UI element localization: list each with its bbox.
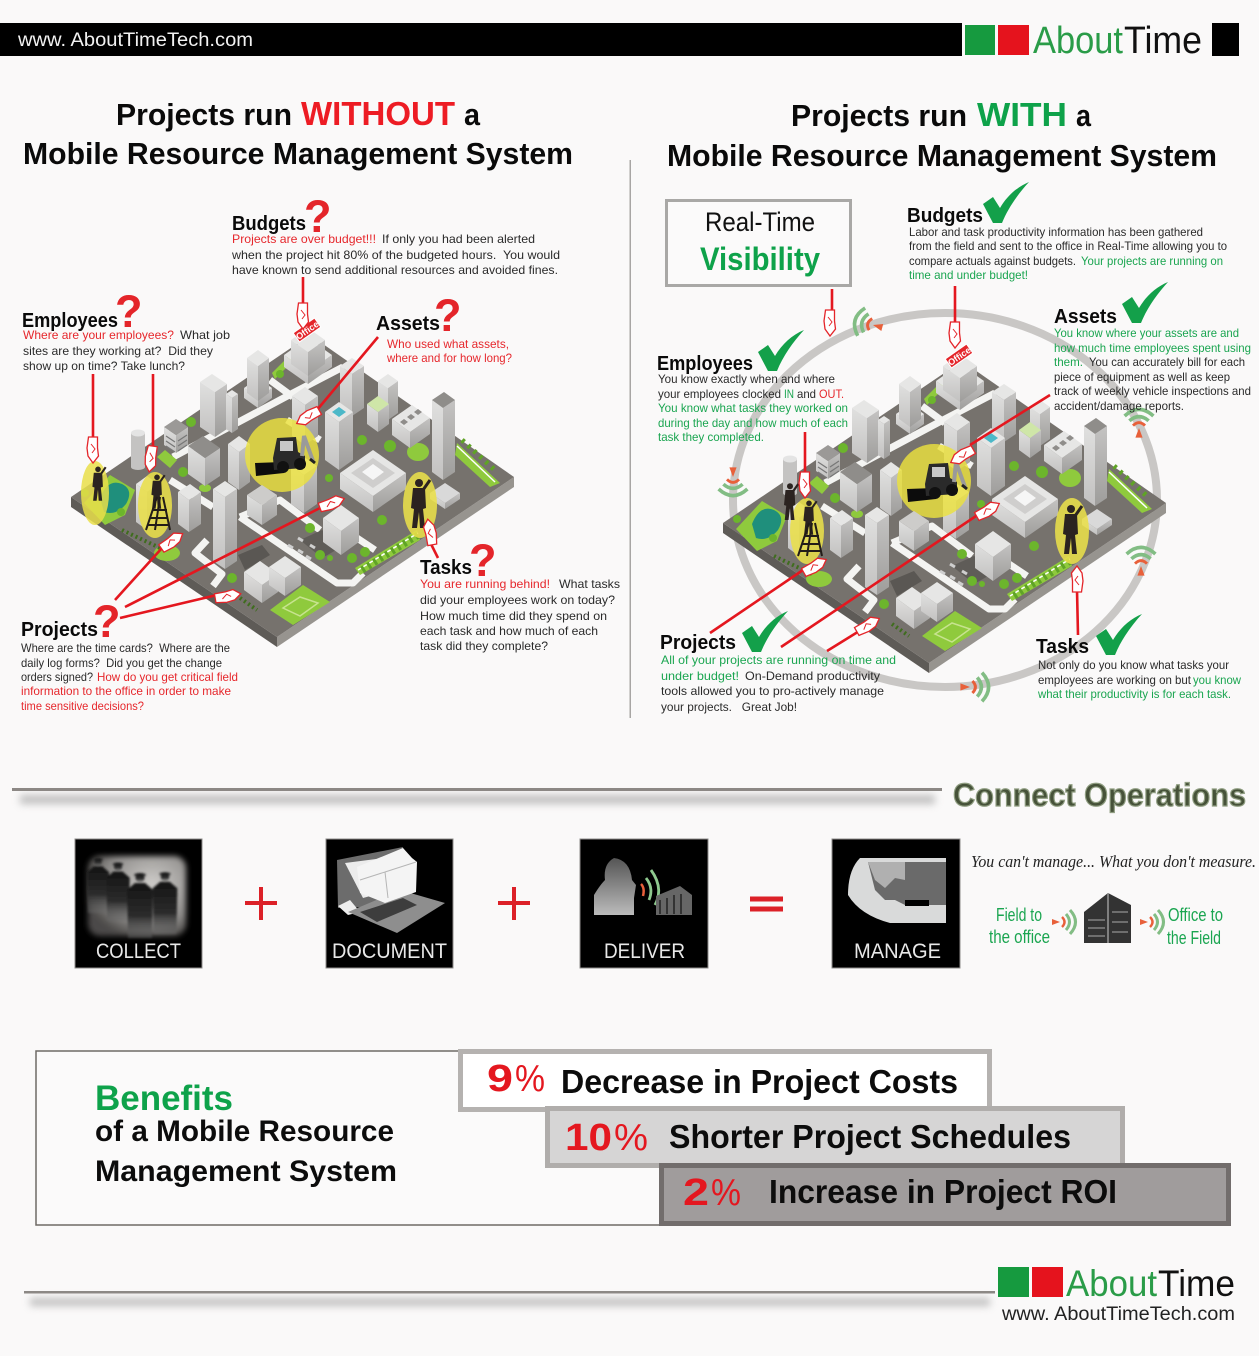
block: Tasks without: each task and how much of each bbox=[420, 624, 598, 638]
heading: with: WITH bbox=[977, 96, 1067, 133]
block: Assets without: where and for how long? bbox=[386, 351, 512, 365]
block: Tasks without: task did they complete? bbox=[420, 639, 548, 653]
equals bbox=[750, 899, 783, 909]
block: Assets with: Assets bbox=[1054, 306, 1117, 328]
block: Employees without: Where are your employees? bbox=[23, 328, 174, 342]
logo: AboutTime bottom: Time bbox=[1158, 1263, 1235, 1304]
block: Budgets without bbox=[231, 191, 560, 277]
logo: AboutTime bottom: About bbox=[1066, 1263, 1158, 1304]
panel: benefits: of a Mobile Resource bbox=[95, 1115, 394, 1148]
callout: Real-Time Visibility bbox=[666, 200, 850, 286]
block: Assets with: You can accurately bill for each bbox=[1089, 355, 1245, 369]
block: Assets with bbox=[1054, 282, 1251, 413]
icon: wireless signals bbox=[719, 306, 1155, 701]
bar: 2%: Increase in Project ROI bbox=[769, 1173, 1117, 1210]
block: Projects with: tools allowed you to pro-actively manage bbox=[661, 684, 884, 698]
heading: with bbox=[667, 96, 1217, 173]
bar: 9%: % bbox=[515, 1058, 545, 1100]
logo: AboutTime top bbox=[965, 20, 1202, 62]
panel: benefits bbox=[36, 1051, 666, 1225]
block: Assets with: how much time employees spent using bbox=[1054, 341, 1251, 355]
block: Tasks with bbox=[1036, 614, 1241, 701]
block: Budgets without: ? bbox=[304, 191, 332, 242]
bar: 10% bbox=[548, 1108, 1122, 1166]
panel: deliver bbox=[580, 839, 708, 968]
ring: real-time loop bbox=[719, 306, 1157, 701]
block: Employees with: task they completed. bbox=[658, 430, 764, 444]
block: Employees with: your employees clocked bbox=[658, 387, 781, 401]
panel: document bbox=[326, 839, 453, 968]
logo: AboutTime top: About bbox=[1033, 20, 1123, 62]
block: Tasks with: employees are working on but bbox=[1038, 673, 1192, 687]
block: Budgets without: Projects are over budget!!! bbox=[232, 232, 376, 246]
pointers: without system bbox=[87, 277, 438, 618]
block: Projects without: information to the office in order to make bbox=[21, 684, 231, 698]
block: Budgets with: time and under budget! bbox=[909, 268, 1028, 282]
block: Budgets without: have known to send additional resources and avoided fines. bbox=[232, 263, 558, 277]
heading: without: WITHOUT bbox=[301, 95, 455, 132]
block: Assets without: Assets bbox=[376, 313, 440, 335]
block: Employees with: Employees bbox=[657, 353, 753, 375]
bar: 10%: 10 bbox=[565, 1117, 612, 1159]
panel: manage: MANAGE bbox=[854, 940, 941, 963]
heading: without: Projects run bbox=[116, 97, 292, 132]
callout: Real-Time Visibility: Real-Time bbox=[705, 207, 815, 237]
heading: with: a bbox=[1076, 98, 1092, 133]
city illustration: without system bbox=[71, 318, 514, 647]
block: Assets with: You know where your assets are and bbox=[1054, 326, 1239, 340]
block: Employees with: during the day and how much of each bbox=[658, 416, 848, 430]
block: Tasks without: You are running behind! bbox=[420, 577, 550, 591]
field to office diagram bbox=[989, 893, 1223, 948]
block: Tasks without: What tasks bbox=[559, 577, 620, 591]
block: Employees with: and bbox=[797, 387, 816, 401]
block: Employees with: You know what tasks they worked on bbox=[658, 401, 848, 415]
block: Projects with: On-Demand productivity bbox=[745, 669, 880, 683]
panel: collect bbox=[75, 839, 202, 968]
block: Budgets without: If only you had been alerted bbox=[382, 232, 535, 246]
bar: 2%: % bbox=[711, 1172, 741, 1214]
block: Budgets with: from the field and sent to the office in Real-Time allowing you to bbox=[909, 239, 1227, 253]
panel: deliver: DELIVER bbox=[604, 940, 685, 963]
block: Projects without: daily log forms? Did you get the change bbox=[21, 656, 222, 670]
panel: document: DOCUMENT bbox=[332, 940, 447, 963]
block: Tasks with: you know bbox=[1193, 673, 1241, 687]
block: Budgets with bbox=[907, 182, 1227, 282]
city illustration: with system bbox=[723, 344, 1166, 673]
panel: collect: COLLECT bbox=[96, 940, 181, 963]
plus bbox=[498, 887, 530, 920]
block: Tasks without: did your employees work on today? bbox=[420, 593, 615, 607]
field to office diagram: Field to bbox=[996, 905, 1042, 925]
footer url: www. AboutTimeTech.com bbox=[1001, 1304, 1235, 1325]
block: Employees without: sites are they working at? Did they bbox=[23, 344, 213, 358]
block: Projects without: time sensitive decisions? bbox=[21, 699, 144, 713]
bar: 9%: 9 bbox=[487, 1058, 513, 1100]
block: Projects with: under budget! bbox=[661, 669, 739, 683]
heading: with: Projects run bbox=[791, 98, 967, 133]
block: Employees with bbox=[657, 330, 848, 444]
header url: www. AboutTimeTech.com bbox=[17, 30, 253, 51]
block: Projects without: orders signed? bbox=[21, 670, 93, 684]
block: Employees with: You know exactly when and where bbox=[658, 372, 835, 386]
block: Assets with: track of weekly vehicle inspections and bbox=[1054, 384, 1251, 398]
plus bbox=[245, 887, 277, 920]
logo: AboutTime top: Time bbox=[1124, 20, 1202, 62]
block: Projects with: Projects bbox=[660, 632, 736, 654]
block: Assets with: piece of equipment as well as keep bbox=[1054, 370, 1230, 384]
block: Budgets with: Labor and task productivity information has been gathered bbox=[909, 225, 1203, 239]
heading: without: Mobile Resource Management System bbox=[23, 136, 573, 171]
block: Budgets without: Budgets bbox=[232, 213, 306, 235]
block: Employees without: Employees bbox=[22, 310, 118, 332]
bar: 9%: Decrease in Project Costs bbox=[561, 1063, 958, 1100]
block: Assets with: them. bbox=[1054, 355, 1083, 369]
bar: 10%: Shorter Project Schedules bbox=[669, 1118, 1071, 1155]
block: Tasks without bbox=[420, 535, 620, 653]
block: Tasks without: How much time did they spend on bbox=[420, 609, 607, 623]
block: Tasks without: Tasks bbox=[420, 557, 472, 579]
block: Projects without: Where are the time cards? Where are the bbox=[21, 641, 230, 655]
block: Budgets with: Budgets bbox=[907, 205, 983, 227]
panel: manage bbox=[832, 839, 960, 968]
block: Projects with bbox=[660, 611, 896, 714]
heading: without bbox=[23, 95, 573, 171]
block: Employees without: ? bbox=[115, 286, 142, 337]
block: Employees with: IN bbox=[784, 387, 794, 401]
block: Employees with: OUT. bbox=[819, 387, 844, 401]
block: Assets without: Who used what assets, bbox=[387, 337, 509, 351]
callout: Real-Time Visibility: Visibility bbox=[700, 241, 820, 277]
heading: without: a bbox=[464, 97, 481, 132]
block: Budgets without: when the project hit 80% of the budgeted hours. You would bbox=[231, 248, 560, 262]
bar: 9% bbox=[460, 1052, 990, 1110]
panel: benefits: Benefits bbox=[95, 1079, 233, 1118]
panel: benefits: Management System bbox=[95, 1155, 397, 1188]
bar: 2% bbox=[662, 1166, 1228, 1224]
block: Projects without bbox=[21, 596, 238, 713]
block: Projects with: All of your projects are running on time and bbox=[661, 653, 896, 667]
block: Projects without: How do you get critical field bbox=[97, 670, 238, 684]
logo: AboutTime bottom bbox=[998, 1263, 1235, 1325]
block: Assets without bbox=[376, 290, 512, 365]
block: Projects without: ? bbox=[93, 596, 120, 647]
block: Assets without: ? bbox=[434, 290, 462, 341]
block: Tasks with: Not only do you know what tasks your bbox=[1038, 658, 1229, 672]
block: Tasks without: ? bbox=[469, 535, 496, 586]
bar: 2%: 2 bbox=[683, 1172, 709, 1214]
block: Employees without: show up on time? Take lunch? bbox=[23, 359, 185, 373]
block: Assets with: accident/damage reports. bbox=[1054, 399, 1184, 413]
field to office diagram: Office to bbox=[1168, 905, 1223, 925]
block: Projects without: Projects bbox=[21, 619, 98, 641]
bar: 10%: % bbox=[614, 1117, 648, 1159]
block: Budgets with: Your projects are running on bbox=[1081, 254, 1223, 268]
block: Tasks with: what their productivity is for each task. bbox=[1037, 687, 1231, 701]
block: Projects with: your projects. Great Job! bbox=[661, 700, 797, 714]
heading: Connect Operations: Connect Operations bbox=[953, 777, 1246, 813]
header bar bbox=[0, 23, 1239, 56]
block: Employees without: What job bbox=[180, 328, 230, 342]
pointers: with system bbox=[710, 286, 1083, 651]
field to office diagram: the office bbox=[989, 927, 1050, 947]
block: Employees without bbox=[22, 286, 230, 373]
block: Budgets with: compare actuals against budgets. bbox=[909, 254, 1076, 268]
heading: with: Mobile Resource Management System bbox=[667, 138, 1217, 173]
block: Tasks with: Tasks bbox=[1036, 636, 1089, 658]
field to office diagram: the Field bbox=[1167, 928, 1221, 948]
